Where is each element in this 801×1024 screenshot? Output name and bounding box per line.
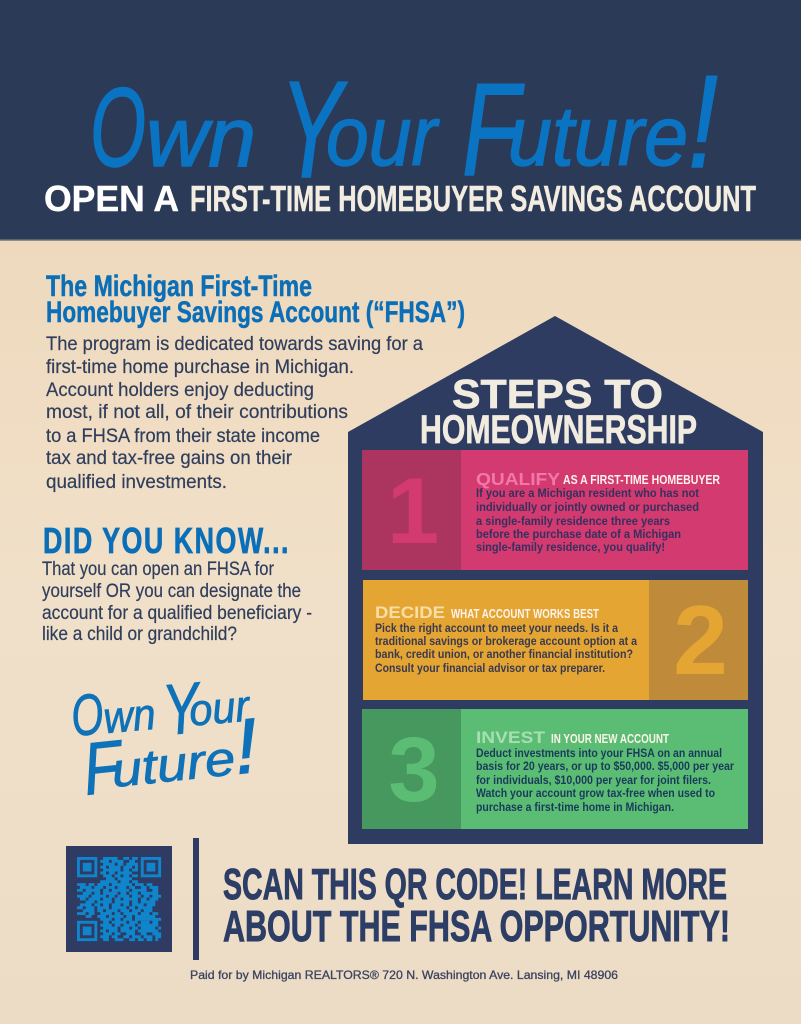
step 2 title: WHAT ACCOUNT WORKS BEST [451, 606, 599, 621]
script slogan: F [79, 724, 129, 811]
heading: the Michigan FHSA [46, 270, 465, 329]
step 3 title [476, 728, 669, 747]
text block: program description: to a FHSA from their state income [46, 426, 320, 447]
text block: program description: The program is dedicated towards saving for a [46, 334, 423, 355]
script slogan: uture [109, 732, 238, 798]
step 3 title: INVEST [476, 728, 546, 747]
text block: program description: most, if not all, of their contributions [46, 402, 348, 423]
script slogan: our [187, 681, 253, 736]
footer: Paid for by Michigan REALTORS® 720 N. Washington Ave. Lansing, MI 48906 [190, 968, 618, 982]
step 2 text: bank, credit union, or another financial institution? [375, 647, 633, 661]
step 1 title: QUALIFY [476, 469, 560, 489]
title: Own Your Future!: F [462, 56, 525, 203]
step 1 text: a single-family residence three years [476, 514, 670, 528]
text block: program description [46, 334, 423, 493]
step 3 text: Deduct investments into your FHSA on an annual [476, 746, 722, 760]
page background [0, 240, 801, 1024]
text block: did you know: yourself OR you can designate the [42, 581, 301, 602]
heading: the Michigan FHSA: The Michigan First-Time [46, 270, 312, 303]
text block: did you know: That you can open an FHSA for [42, 559, 275, 580]
script slogan: O [68, 681, 106, 749]
number 3: 3 [388, 719, 440, 821]
text block: did you know: like a child or grandchild? [42, 624, 237, 645]
step 1 text [476, 486, 699, 554]
panel: step 1 qualify [362, 450, 748, 570]
step 2 text: Consult your financial advisor or tax preparer. [375, 661, 605, 675]
number 2: 2 [673, 585, 728, 695]
heading: did you know: DID YOU KNOW... [43, 520, 290, 561]
text block: did you know: account for a qualified beneficiary - [42, 603, 312, 624]
step 3 text [476, 746, 734, 814]
divider bar [193, 838, 199, 960]
panel: step 2 decide [363, 580, 748, 700]
number 1: 1 [387, 458, 439, 563]
house heading: HOMEOWNERSHIP [420, 408, 697, 452]
title: Own Your Future!: uture [508, 89, 688, 183]
step 3 text: purchase a first-time home in Michigan. [476, 800, 674, 814]
text block: program description: Account holders enjoy deducting [46, 380, 314, 401]
title: Own Your Future!: ! [688, 48, 718, 195]
step 3 text: basis for 20 years, or up to $50,000. $5,000 per year [476, 759, 734, 773]
title: Own Your Future! [90, 48, 718, 207]
panel: step 3 invest [362, 709, 748, 829]
title: Own Your Future!: our [326, 89, 440, 183]
call to action [223, 860, 730, 951]
step 1 text: single-family residence, you qualify! [476, 540, 665, 554]
step 2 text: traditional savings or brokerage account option at a [375, 634, 637, 648]
title: Own Your Future!: Y [280, 53, 348, 207]
house heading: STEPS TO [452, 371, 663, 417]
text block: program description: qualified investments. [46, 472, 227, 493]
title: Own Your Future!: wn [146, 90, 256, 184]
script slogan: ! [229, 701, 262, 791]
script slogan [68, 664, 263, 811]
step 2 title [375, 603, 599, 622]
QR code [66, 846, 172, 952]
text block: did you know [42, 559, 312, 645]
text block: program description: first-time home purchase in Michigan. [46, 357, 354, 378]
step 2 text [375, 621, 637, 675]
step 1 text: If you are a Michigan resident who has not [476, 486, 699, 500]
text block: program description: tax and tax-free gains on their [46, 448, 293, 469]
step 1 title: AS A FIRST-TIME HOMEBUYER [563, 472, 720, 487]
step 2 text: Pick the right account to meet your needs. Is it a [375, 621, 618, 635]
heading: the Michigan FHSA: Homebuyer Savings Account (“FHSA”) [46, 296, 465, 329]
step 1 text: before the purchase date of a Michigan [476, 527, 681, 541]
title: Own Your Future!: O [90, 65, 146, 190]
step 1 title [476, 469, 720, 489]
house heading [420, 371, 697, 452]
step 3 text: for individuals, $10,000 per year for joint filers. [476, 773, 711, 787]
step 3 text: Watch your account grow tax-free when used to [476, 786, 715, 800]
step 2 title: DECIDE [375, 603, 445, 622]
step 1 text: individually or jointly owned or purchased [476, 500, 699, 514]
script slogan: Y [160, 668, 206, 751]
house graphic: steps to homeownership [348, 316, 763, 844]
subtitle: OPEN A [44, 178, 179, 219]
script slogan: wn [101, 690, 158, 743]
step 3 title: IN YOUR NEW ACCOUNT [551, 731, 669, 746]
header band [0, 0, 801, 241]
